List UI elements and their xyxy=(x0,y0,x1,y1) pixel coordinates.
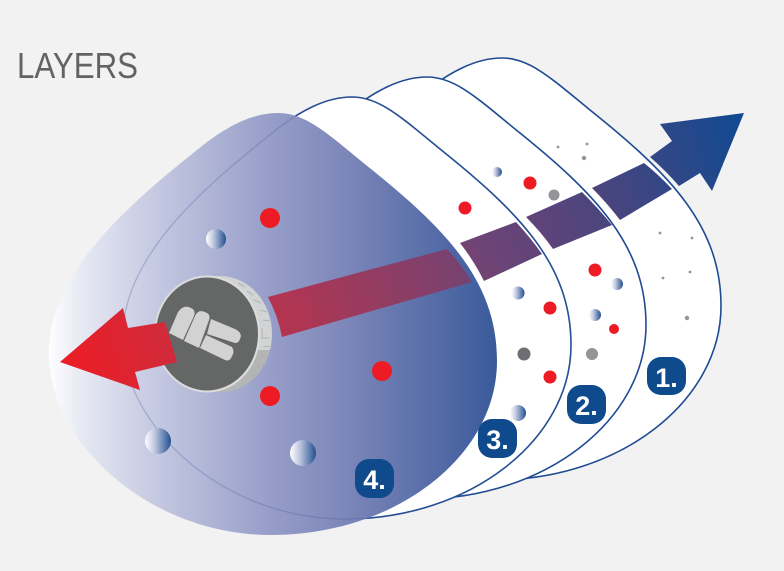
title: LAYERS xyxy=(17,45,138,86)
arrow: blue exit arrow with band segments xyxy=(268,113,744,337)
panel: layer 4 gradient blob xyxy=(49,97,571,535)
badge 3 xyxy=(478,419,517,458)
badge 4: 4. xyxy=(363,465,386,495)
badge 3: 3. xyxy=(486,425,509,455)
icon: coin with pills xyxy=(155,276,272,392)
badge 1: 1. xyxy=(655,363,678,393)
badge 2: 2. xyxy=(575,391,598,421)
badge 1 xyxy=(647,357,686,395)
panel: layer 2 xyxy=(198,77,646,499)
arrow: red arrow pointing left xyxy=(60,308,177,390)
panel: layer 1 xyxy=(273,58,721,480)
badge 2 xyxy=(567,385,606,424)
panel: layer 3 xyxy=(123,97,571,519)
badge 4 xyxy=(355,459,394,498)
